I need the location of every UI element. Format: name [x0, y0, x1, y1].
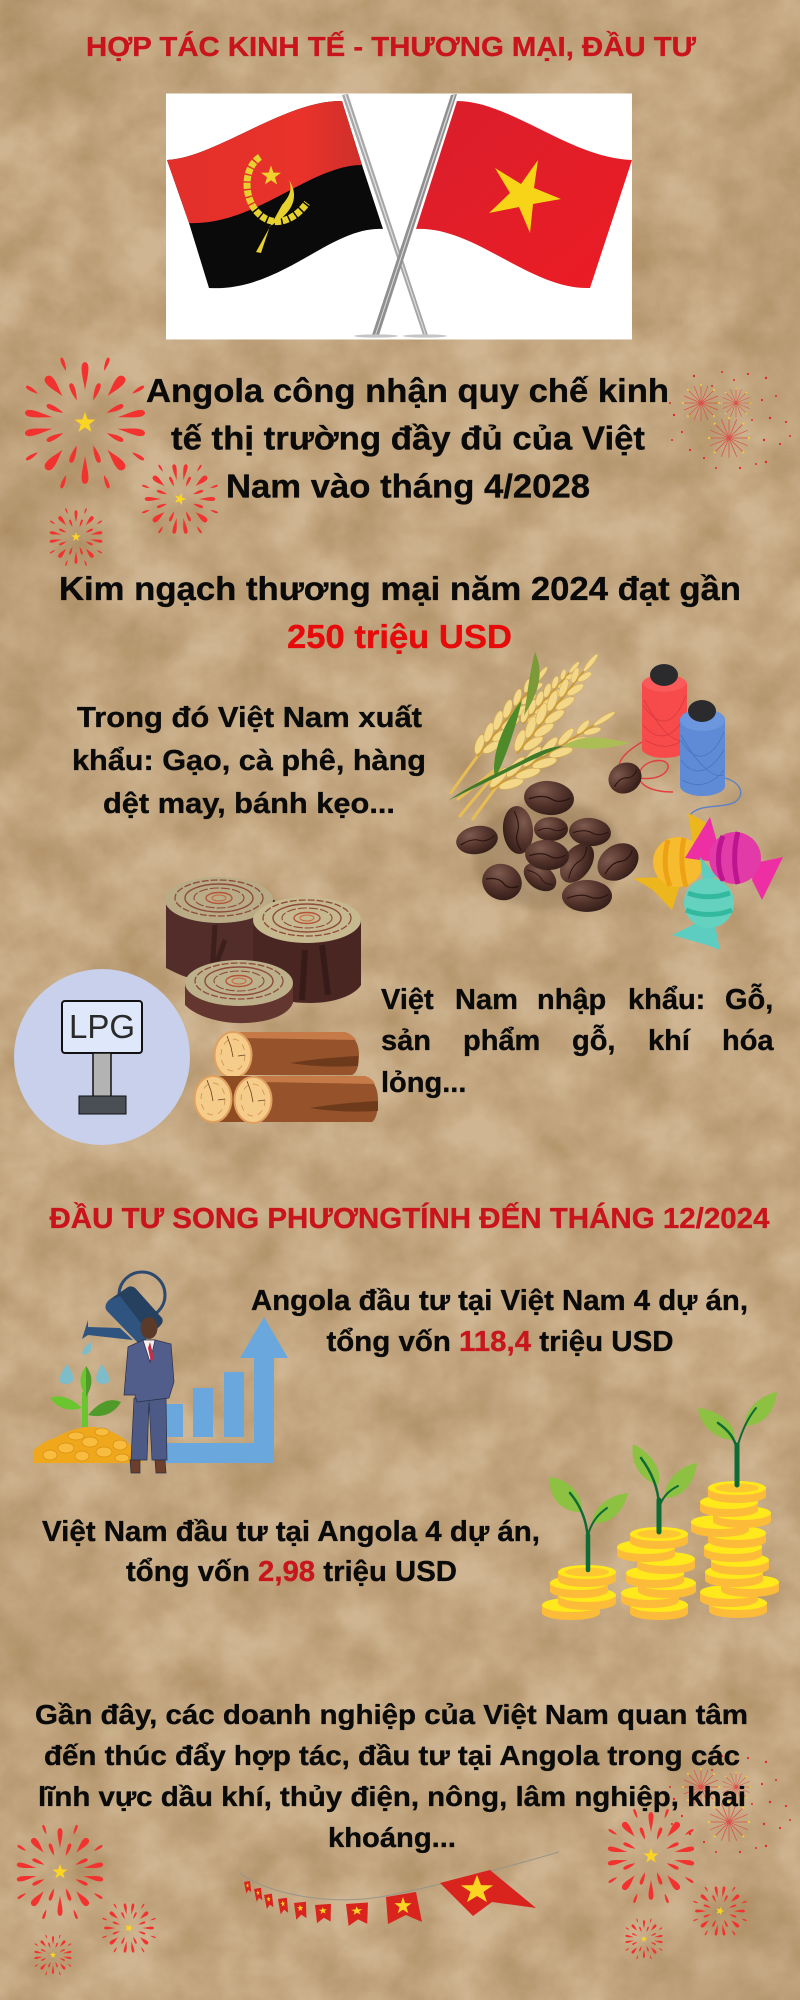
yellow candy	[633, 813, 707, 910]
text: Vietnam imports	[381, 982, 774, 1099]
closing text: Gần đây, các doanh nghiệp của Việt Nam quan tâm	[35, 1699, 748, 1730]
closing text: đến thúc đẩy hợp tác, đầu tư tại Angola trong các	[44, 1740, 740, 1771]
text: Vietnam exports: Trong đó Việt Nam xuất	[77, 702, 422, 734]
large pennants	[386, 1870, 536, 1924]
text: Vietnam imports: Việt	[381, 984, 434, 1016]
fireworks bottom left	[16, 1825, 156, 1975]
icon: thread spools	[619, 664, 741, 815]
coin stack 2	[617, 1527, 696, 1620]
text: Vietnam investment in Angola	[42, 1516, 540, 1588]
text: Vietnam imports: gỗ,	[572, 1023, 616, 1057]
seedlings	[550, 1392, 777, 1570]
coin stack 3	[691, 1481, 779, 1618]
headline: trade turnover: 250 triệu USD	[287, 618, 512, 655]
icon: tree stumps	[165, 877, 361, 1023]
Vietnam flag	[416, 101, 632, 288]
bunting with Vietnamese flags	[240, 1852, 559, 1926]
text: Vietnam imports: nhập	[537, 984, 606, 1016]
red spool	[642, 664, 687, 758]
fireworks top left	[24, 357, 218, 566]
text: Angola investment in Vietnam	[251, 1285, 748, 1358]
headline: market economy status: tế thị trường đầy đủ của Việt	[171, 420, 645, 456]
closing text	[35, 1699, 748, 1853]
headline: market economy status: Angola công nhận quy chế kinh	[146, 372, 669, 409]
icon: LPG sign: LPG	[69, 1008, 135, 1045]
fireworks bottom right	[607, 1809, 747, 1959]
businessman	[124, 1317, 174, 1473]
lower logs	[194, 1076, 378, 1123]
teal candy	[672, 857, 734, 950]
icon: watering can and businessman with growth chart	[34, 1272, 288, 1473]
text: Vietnam exports: khẩu: Gạo, cà phê, hàng	[72, 745, 426, 777]
text: Vietnam imports: sản	[381, 1025, 431, 1057]
text: Vietnam imports: khí	[648, 1025, 691, 1057]
upper log	[214, 1032, 359, 1078]
stump 3	[185, 960, 293, 1023]
Angola flag	[167, 101, 383, 288]
icon: LPG sign	[14, 969, 190, 1145]
stump 2	[253, 897, 361, 1003]
text: Vietnam exports	[72, 702, 426, 820]
headline: market economy status	[146, 372, 669, 504]
coin stack 1	[542, 1565, 616, 1620]
text: Vietnam imports: phẩm	[463, 1025, 540, 1057]
text: Vietnam investment in Angola: Việt Nam đầu tư tại Angola 4 dự án,	[42, 1516, 540, 1548]
headline: market economy status: Nam vào tháng 4/2028	[226, 468, 590, 504]
text: Vietnam imports: Nam	[455, 984, 518, 1016]
icon: coin stacks with seedlings	[542, 1392, 779, 1620]
text: Vietnam imports: Gỗ,	[725, 982, 773, 1016]
Angola emblem	[247, 157, 307, 253]
flags of Angola and Vietnam	[166, 94, 632, 340]
text: Angola investment in Vietnam: tổng vốn 118,4 triệu USD	[326, 1326, 674, 1358]
icon: logs	[194, 1032, 378, 1123]
fireworks bottom right sparkle	[669, 1755, 791, 1853]
closing text: lĩnh vực dầu khí, thủy điện, nông, lâm nghiệp, khai	[38, 1781, 746, 1812]
text: Vietnam imports: hóa	[722, 1025, 774, 1057]
text: Vietnam imports: khẩu:	[628, 984, 705, 1016]
text: Vietnam imports: lỏng...	[381, 1067, 466, 1099]
watering can	[82, 1272, 165, 1354]
icon: rice ears	[449, 646, 630, 820]
headline: trade turnover	[59, 570, 741, 655]
stump 1	[165, 877, 275, 978]
text: Vietnam exports: dệt may, bánh kẹo...	[103, 788, 395, 820]
heading: bilateral investment: ĐẦU TƯ SONG PHƯƠNGTÍNH ĐẾN THÁNG 12/2024	[50, 1201, 770, 1235]
headline: trade turnover: Kim ngạch thương mại năm 2024 đạt gần	[59, 570, 741, 607]
blue spool	[680, 700, 725, 796]
closing text: khoáng...	[328, 1822, 456, 1853]
pink candy	[685, 817, 783, 900]
growth chart	[155, 1317, 288, 1463]
text: Vietnam investment in Angola: tổng vốn 2,98 triệu USD	[126, 1556, 457, 1588]
flag poles	[342, 94, 457, 338]
icon: candies	[633, 813, 783, 950]
icon: coffee beans	[454, 757, 647, 912]
plant and coin pile	[34, 1364, 143, 1463]
text: Angola investment in Vietnam: Angola đầu tư tại Việt Nam 4 dự án,	[251, 1285, 748, 1317]
fireworks top right	[669, 371, 791, 469]
title: HỢP TÁC KINH TẾ - THƯƠNG MẠI, ĐẦU TƯ	[86, 31, 697, 62]
